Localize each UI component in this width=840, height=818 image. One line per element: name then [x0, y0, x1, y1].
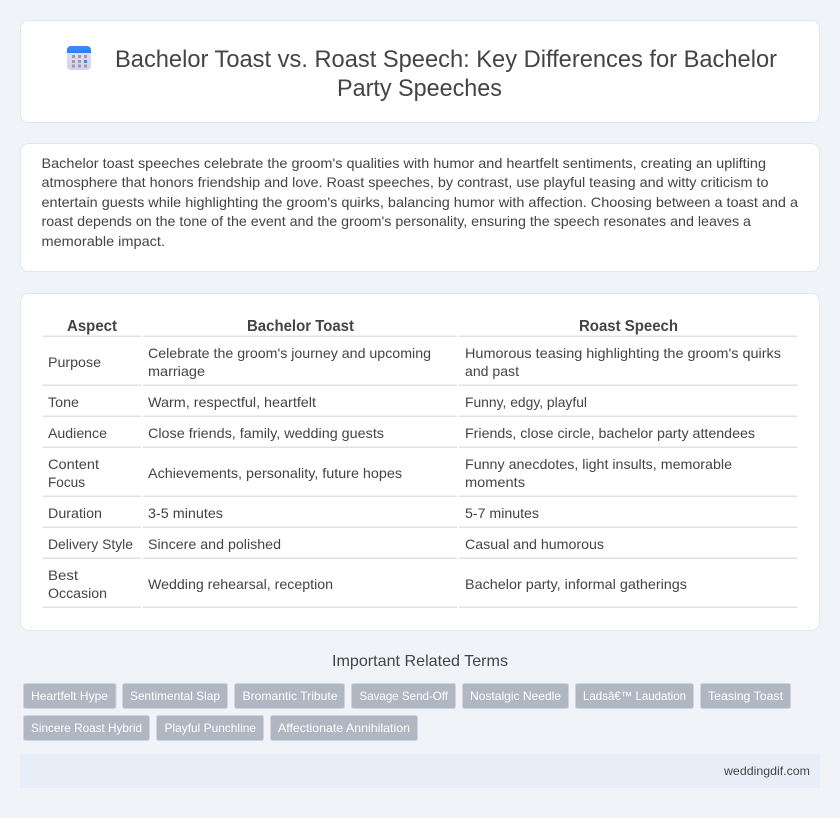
tag: Lads Laudation: Ladsâ€™ Laudation [583, 689, 686, 703]
row: content focus: Focus [48, 474, 85, 490]
table header: Roast Speech [579, 318, 678, 335]
row: delivery style: Casual and humorous [465, 536, 604, 552]
text block: introduction: Bachelor toast speeches celebrate the groom's qualities with humor and heartfelt sentiments, creating an uplifting [42, 155, 766, 171]
row: purpose: marriage [148, 363, 205, 379]
row: duration: 3-5 minutes [148, 505, 223, 521]
tag: Affectionate Annihilation [270, 716, 418, 740]
row: audience: Audience [48, 425, 107, 441]
text block: introduction [42, 155, 798, 249]
row: content focus [48, 456, 732, 490]
row: duration: Duration [48, 505, 102, 521]
row: tone: Tone [48, 394, 79, 410]
row: purpose: and past [465, 363, 519, 379]
title [115, 46, 777, 102]
row: audience: Close friends, family, wedding guests [148, 425, 384, 441]
row: delivery style [48, 536, 604, 552]
row: purpose: Celebrate the groom's journey and upcoming [148, 345, 431, 361]
tag: Nostalgic Needle [462, 684, 568, 708]
row: best occasion: Wedding rehearsal, reception [148, 576, 333, 592]
row: content focus: Content [48, 456, 99, 472]
row: content focus: Achievements, personality, future hopes [148, 465, 402, 481]
tag: Teasing Toast: Teasing Toast [708, 689, 784, 703]
row: audience [48, 425, 755, 441]
text block: introduction: atmosphere that honors friendship and love. Roast speeches, by contrast, use playful teasing and witty criticism to [42, 174, 769, 190]
footer: weddingdif.com [723, 764, 810, 778]
row: purpose [48, 345, 781, 379]
tag: Bromantic Tribute [234, 684, 344, 708]
panel: header [20, 20, 820, 122]
footer [20, 754, 820, 788]
tag: Playful Punchline: Playful Punchline [164, 721, 256, 735]
tag: Sincere Roast Hybrid: Sincere Roast Hybrid [31, 721, 142, 735]
title: Party Speeches [337, 75, 502, 102]
icon: calendar [67, 46, 91, 70]
tag: Affectionate Annihilation: Affectionate Annihilation [278, 721, 410, 735]
text block: introduction: roast depends on the tone of the event and the groom's personality, ensuring the speech resonates and leaves a [42, 213, 751, 229]
row: content focus: moments [465, 474, 525, 490]
row: audience: Friends, close circle, bachelor party attendees [465, 425, 755, 441]
row: delivery style: Delivery Style [48, 536, 133, 552]
tag: Teasing Toast [700, 684, 790, 708]
tag: Heartfelt Hype: Heartfelt Hype [31, 689, 108, 703]
heading: important related terms: Important Related Terms [332, 653, 508, 670]
tag: Bromantic Tribute: Bromantic Tribute [242, 689, 338, 703]
tag: Sentimental Slap: Sentimental Slap [130, 689, 220, 703]
row: best occasion: Bachelor party, informal gatherings [465, 576, 687, 592]
tag: Heartfelt Hype [24, 684, 116, 708]
tag: Nostalgic Needle: Nostalgic Needle [470, 689, 561, 703]
row: purpose: Purpose [48, 354, 101, 370]
table header: Bachelor Toast [247, 318, 355, 335]
row: delivery style: Sincere and polished [148, 536, 281, 552]
text block: introduction: memorable impact. [42, 233, 165, 249]
row: tone: Funny, edgy, playful [465, 394, 587, 410]
tag: Savage Send-Off: Savage Send-Off [360, 689, 449, 703]
panel: introduction [20, 144, 820, 272]
text block: introduction: entertain guests while highlighting the groom's quirks, balancing humor with affection. Choosing between a toast and a [42, 194, 798, 210]
tag: Playful Punchline [156, 716, 264, 740]
panel: comparison table [20, 294, 820, 630]
tag: Savage Send-Off [352, 684, 456, 708]
row: duration: 5-7 minutes [465, 505, 539, 521]
table header [67, 318, 678, 335]
row: best occasion [48, 567, 687, 601]
row: purpose: Humorous teasing highlighting the groom's quirks [465, 345, 781, 361]
row: best occasion: Occasion [48, 585, 107, 601]
row: best occasion: Best [48, 567, 78, 583]
row: content focus: Funny anecdotes, light insults, memorable [465, 456, 732, 472]
tags: related terms [24, 684, 790, 740]
row: duration [48, 505, 539, 521]
row: tone: Warm, respectful, heartfelt [148, 394, 316, 410]
tag: Sentimental Slap [122, 684, 228, 708]
title: Bachelor Toast vs. Roast Speech: Key Differences for Bachelor [115, 46, 777, 73]
tag: Lads Laudation [576, 684, 694, 708]
row: tone [48, 394, 587, 410]
table header: Aspect [67, 318, 118, 335]
tag: Sincere Roast Hybrid [24, 716, 150, 740]
